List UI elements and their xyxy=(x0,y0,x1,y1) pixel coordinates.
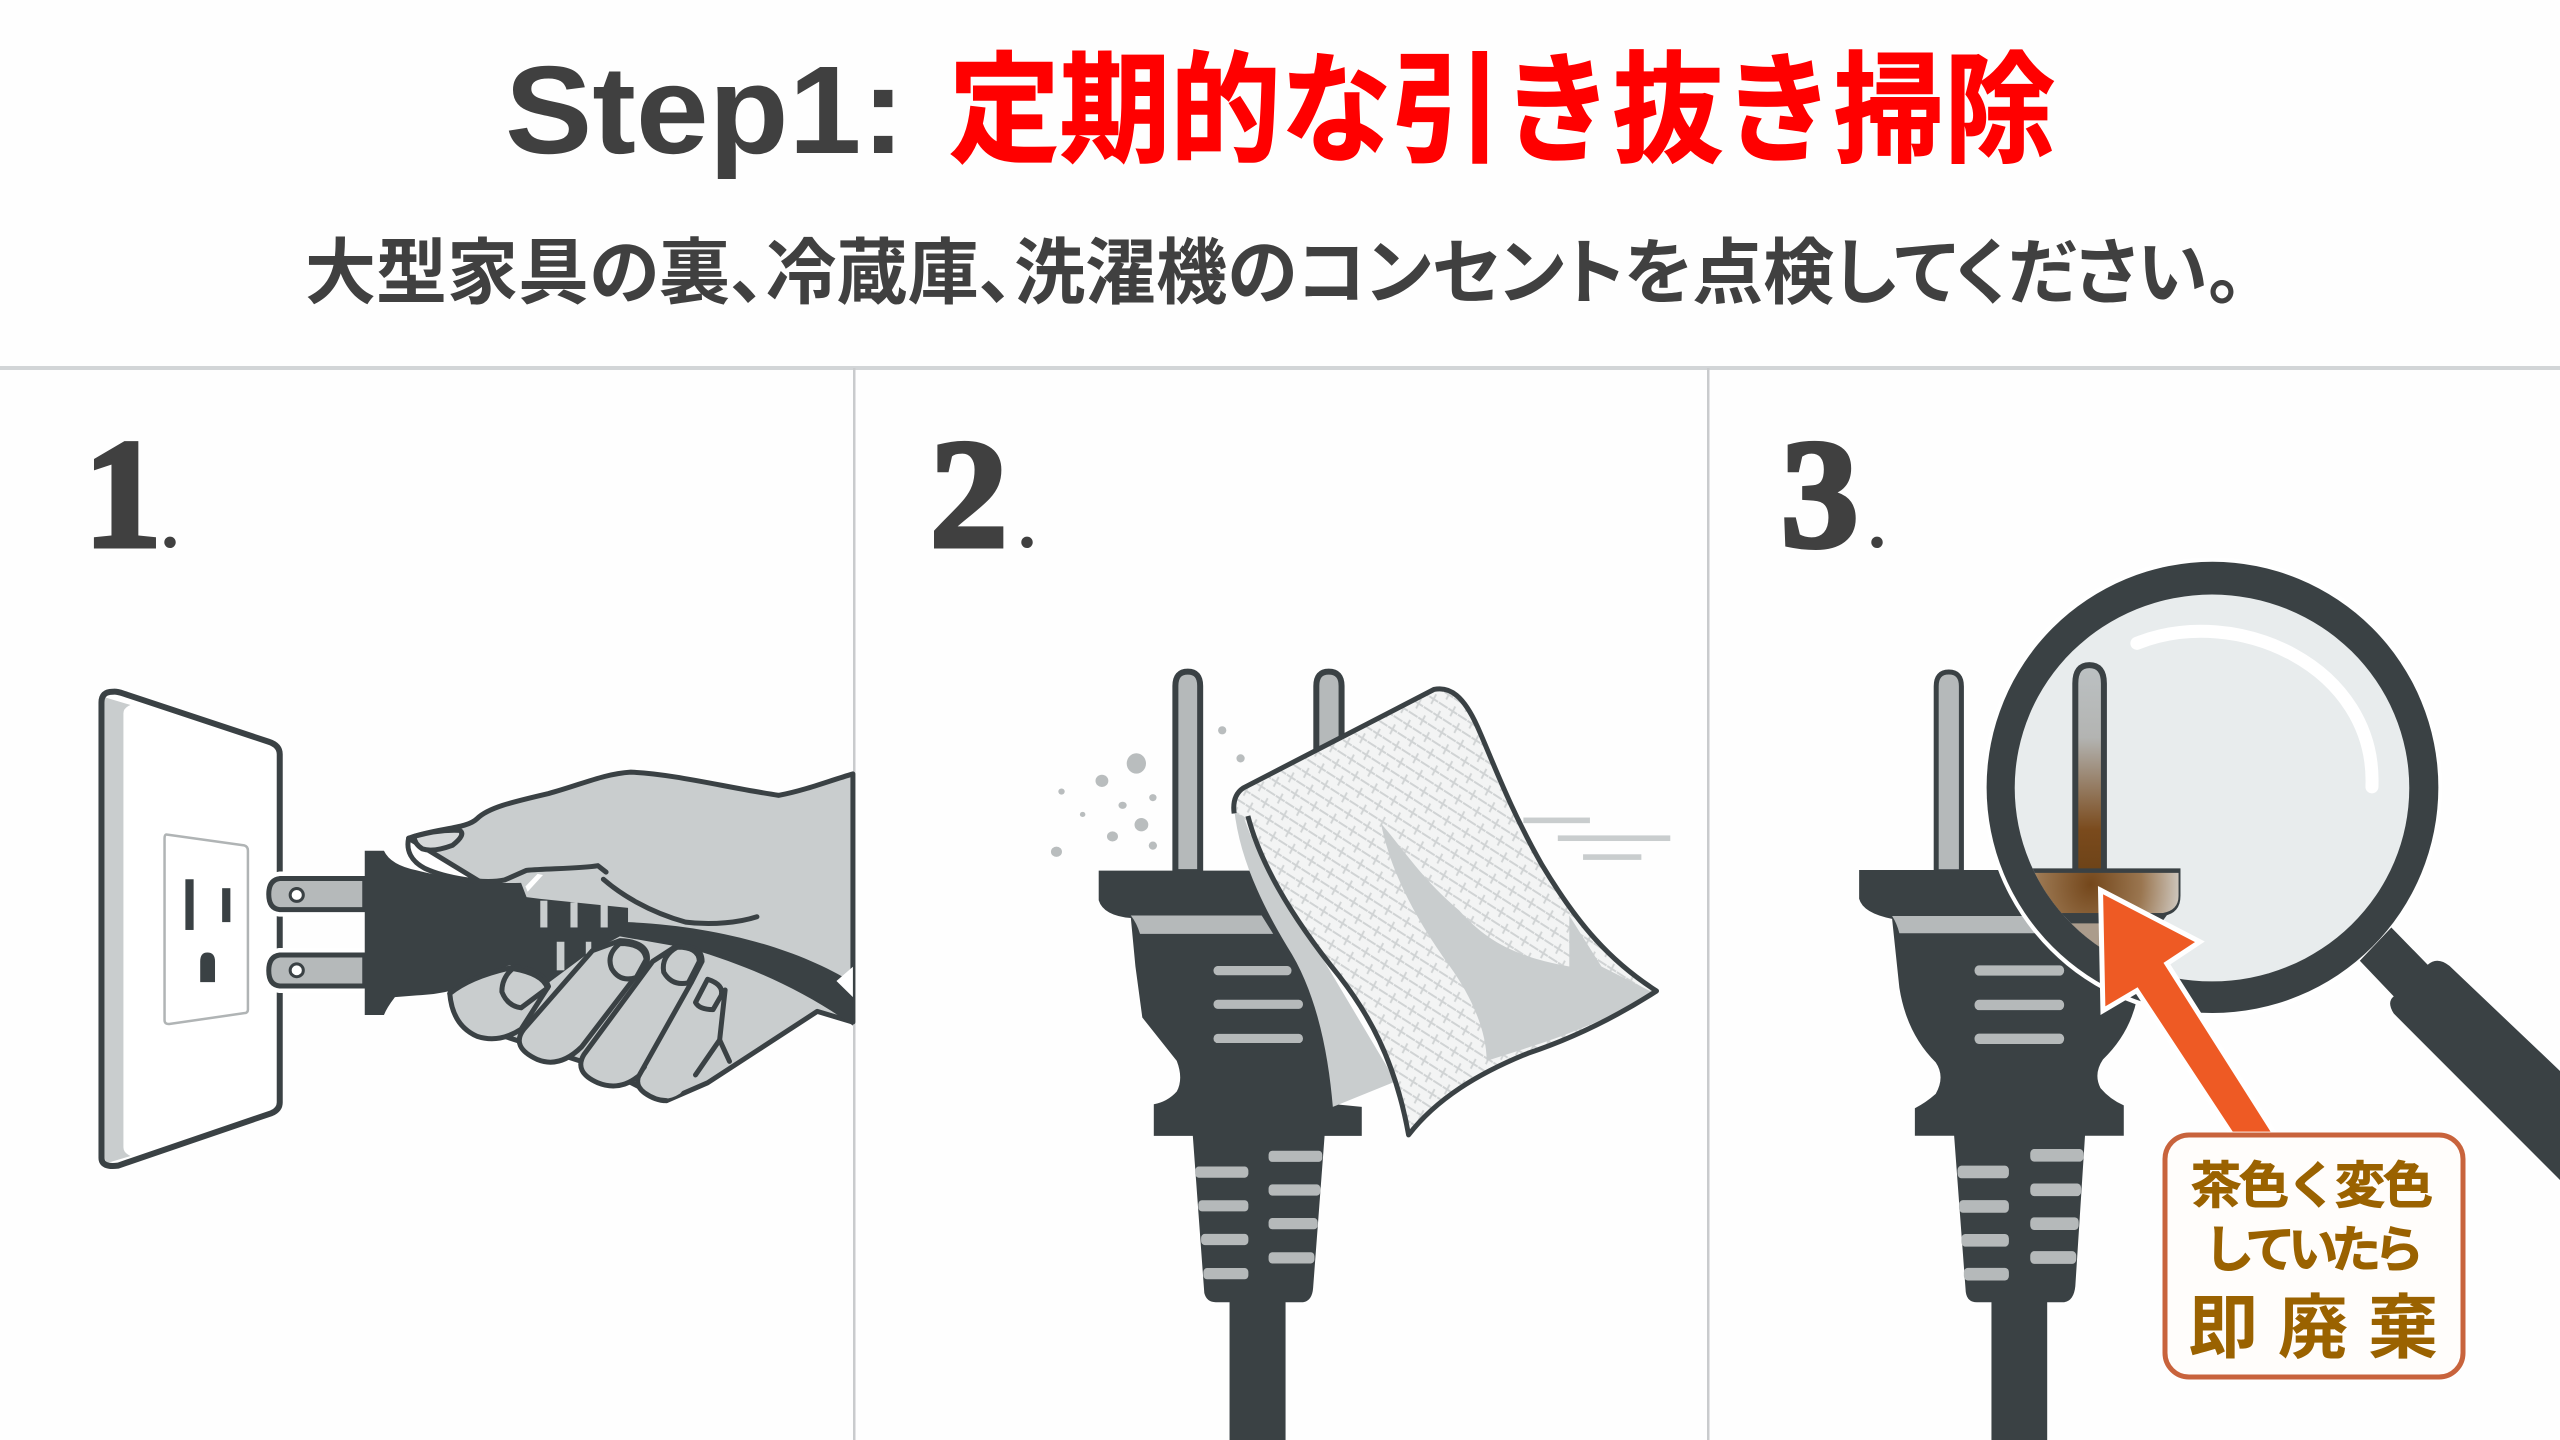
icon: plug prong xyxy=(1936,672,1961,872)
panel: step 2 wipe with cloth xyxy=(930,408,1670,1440)
illustration: magnified plug inspection xyxy=(1859,557,2560,1440)
callout: 茶色く変色 xyxy=(2191,1158,2433,1214)
icon: motion lines xyxy=(1523,818,1670,860)
title xyxy=(505,41,2055,180)
icon: plug body and cord xyxy=(365,851,853,1026)
icon: dust particles xyxy=(1051,726,1245,857)
icon: cloth xyxy=(1234,689,1657,1135)
callout xyxy=(2165,1135,2463,1377)
icon: fingers xyxy=(450,941,730,1101)
icon: wall plate xyxy=(101,692,280,1166)
icon: thumb xyxy=(408,830,757,924)
illustration: hand pulling plug from wall outlet xyxy=(101,692,853,1166)
icon: magnifying glass xyxy=(1983,557,2560,1180)
panel: step 1 unplug xyxy=(84,408,853,1166)
title: Step1: xyxy=(505,41,905,180)
icon: hand back xyxy=(409,772,853,1101)
panel: step 3 inspect xyxy=(1781,408,2560,1440)
illustration: plug being wiped with cloth xyxy=(1051,672,1670,1440)
icon: wrist gap xyxy=(836,967,853,997)
subtitle: 大型家具の裏、冷蔵庫、洗濯機のコンセントを点検してください。 xyxy=(305,234,2243,314)
icon: plug body xyxy=(1099,871,1362,1440)
step number 3: 3. xyxy=(1781,408,1884,580)
icon: plug body xyxy=(1859,870,2180,1440)
icon: plug prongs xyxy=(269,879,365,986)
title: 定期的な引き抜き掃除 xyxy=(949,44,2055,178)
arrow xyxy=(2101,890,2275,1134)
step number 1: 1. xyxy=(84,408,176,580)
callout: 即廃棄 xyxy=(2188,1289,2438,1367)
callout: していたら xyxy=(2204,1222,2424,1278)
icon: plug prongs xyxy=(1175,672,1342,872)
step number 2: 2. xyxy=(930,408,1034,580)
icon: outlet face xyxy=(165,835,248,1024)
